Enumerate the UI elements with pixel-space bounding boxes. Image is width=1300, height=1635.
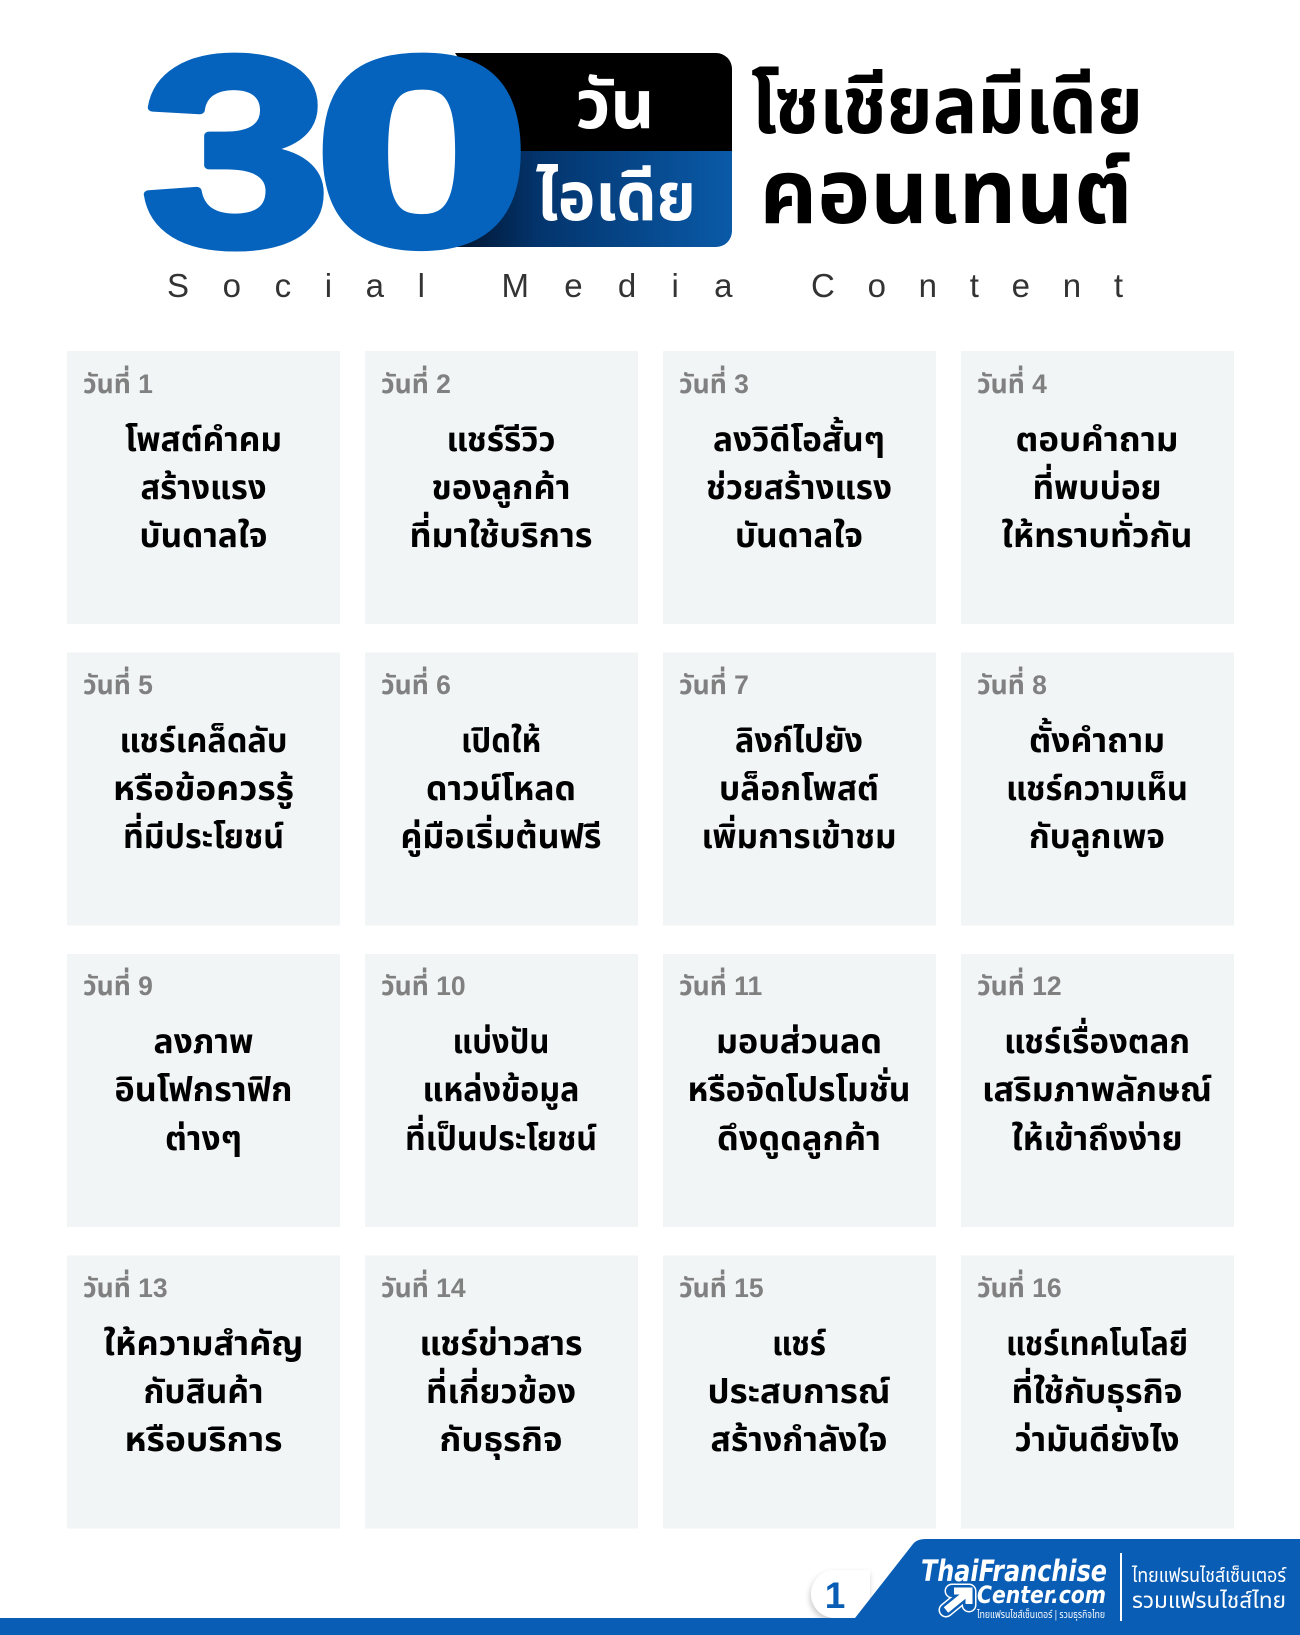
title block <box>141 2 1143 304</box>
digit 3: 3 <box>141 2 331 302</box>
card day 14: ที่เกี่ยวข้อง <box>426 1367 576 1411</box>
card day 8 <box>961 652 1234 926</box>
card day 7: เพิ่มการเข้าชม <box>702 814 896 856</box>
card day 9: ต่างๆ <box>165 1120 242 1158</box>
card day 7 <box>663 652 936 926</box>
card day 1: โพสต์คำคม <box>125 421 282 459</box>
page number pill <box>811 1570 870 1618</box>
card day 8: วันที่ 8 <box>977 666 1047 700</box>
word: idea: ไอเดีย <box>536 159 696 235</box>
card day 7: บล็อกโพสต์ <box>719 770 879 808</box>
card day 15: แชร์ <box>772 1325 826 1363</box>
card day 16: ที่ใช้กับธุรกิจ <box>1012 1367 1182 1412</box>
card day 1: สร้างแรง <box>140 469 266 507</box>
card day 9: อินโฟกราฟิก <box>114 1071 292 1109</box>
card day 16: วันที่ 16 <box>977 1269 1062 1303</box>
subtitle word 3: Content <box>811 267 1123 304</box>
word: wan: วัน <box>576 67 654 143</box>
card day 10: แบ่งปัน <box>452 1023 550 1061</box>
card day 11 <box>663 954 936 1227</box>
card day 6: เปิดให้ <box>461 722 541 760</box>
card day 13: ให้ความสำคัญ <box>104 1325 304 1363</box>
card day 4 <box>961 351 1234 624</box>
card day 15 <box>663 1256 936 1528</box>
card day 4: วันที่ 4 <box>977 365 1047 399</box>
card day 1 <box>67 351 340 624</box>
card day 12 <box>961 954 1234 1227</box>
card day 9 <box>67 954 340 1227</box>
card day 5: ที่มีประโยชน์ <box>123 812 284 856</box>
card day 6: ดาวน์โหลด <box>426 770 576 808</box>
logo tagline: ไทยแฟรนไชส์เซ็นเตอร์ | รวมธุรกิจไทย <box>976 1609 1105 1621</box>
card day 4: ที่พบบ่อย <box>1032 463 1162 507</box>
card day 2: ของลูกค้า <box>432 469 570 508</box>
card day 12: แชร์เรื่องตลก <box>1004 1017 1190 1061</box>
title box: black top <box>455 53 732 151</box>
card day 2: ที่มาใช้บริการ <box>410 511 592 555</box>
card day 9: ลงภาพ <box>154 1023 254 1061</box>
logo name line 2: Center.com <box>977 1581 1106 1609</box>
card day 3: ช่วยสร้างแรง <box>706 469 892 507</box>
card day 14 <box>365 1256 638 1528</box>
card day 15: ประสบการณ์ <box>708 1373 890 1411</box>
card day 10 <box>365 954 638 1227</box>
card day 11: หรือจัดโปรโมชั่น <box>688 1066 910 1109</box>
subtitle word 2: Media <box>502 267 733 304</box>
card day 3: ลงวิดีโอสั้นๆ <box>713 416 885 459</box>
card day 5 <box>67 652 340 926</box>
card day 2: แชร์รีวิว <box>446 421 556 459</box>
card day 6 <box>365 652 638 926</box>
footer divider <box>1120 1553 1122 1621</box>
card day 15: สร้างกำลังใจ <box>710 1421 888 1459</box>
card day 3: บันดาลใจ <box>735 517 863 555</box>
card day 14: วันที่ 14 <box>381 1269 466 1303</box>
card day 12: วันที่ 12 <box>977 967 1062 1001</box>
card day 5: หรือข้อควรรู้ <box>113 770 294 809</box>
title box: blue bottom <box>455 151 732 247</box>
card day 3 <box>663 351 936 624</box>
card day 11: ดึงดูดลูกค้า <box>717 1120 881 1159</box>
card day 11: วันที่ 11 <box>679 967 762 1001</box>
card day 2: วันที่ 2 <box>381 365 451 399</box>
logo <box>921 1554 1107 1621</box>
subtitle word 1: Social <box>167 267 425 304</box>
footer blue band <box>0 1539 1300 1635</box>
card day 12: เสริมภาพลักษณ์ <box>982 1071 1212 1109</box>
card day 14: แชร์ข่าวสาร <box>420 1325 582 1363</box>
heading line 1: โซเชียลมีเดีย <box>751 61 1143 150</box>
card day 3: วันที่ 3 <box>679 365 749 399</box>
card day 10: แหล่งข้อมูล <box>422 1071 580 1110</box>
card day 1: วันที่ 1 <box>83 365 153 399</box>
card day 6: วันที่ 6 <box>381 666 451 700</box>
card day 10: วันที่ 10 <box>381 967 466 1001</box>
card day 14: กับธุรกิจ <box>440 1421 562 1460</box>
heading line 2: คอนเทนต์ <box>760 143 1132 243</box>
digit 0: 0 <box>313 2 531 302</box>
footer <box>0 1539 1300 1635</box>
big number 30 <box>141 2 531 302</box>
card day 16 <box>961 1256 1234 1528</box>
card day 8: แชร์ความเห็น <box>1006 770 1188 808</box>
card day 15: วันที่ 15 <box>679 1269 764 1303</box>
subtitle <box>167 267 1123 304</box>
card day 12: ให้เข้าถึงง่าย <box>1012 1120 1182 1158</box>
card day 13: กับสินค้า <box>144 1373 264 1411</box>
card day 16: ว่ามันดียังไง <box>1014 1421 1180 1459</box>
card day 5: แชร์เคล็ดลับ <box>120 722 288 760</box>
card day 1: บันดาลใจ <box>140 517 268 555</box>
card day 10: ที่เป็นประโยชน์ <box>405 1114 597 1158</box>
logo arrow icon <box>946 1591 969 1610</box>
page number: 1 <box>825 1575 845 1616</box>
card day 16: แชร์เทคโนโลยี <box>1006 1325 1188 1363</box>
card day 13 <box>67 1256 340 1528</box>
card day 11: มอบส่วนลด <box>716 1023 882 1061</box>
logo name line 1: ThaiFranchise <box>921 1554 1107 1588</box>
card day 4: ตอบคำถาม <box>1016 421 1178 459</box>
card day 6: คู่มือเริ่มต้นฟรี <box>400 814 602 857</box>
card day 13: หรือบริการ <box>124 1421 282 1459</box>
card day 13: วันที่ 13 <box>83 1269 168 1303</box>
card day 4: ให้ทราบทั่วกัน <box>1002 512 1192 555</box>
card day 8: ตั้งคำถาม <box>1029 717 1165 760</box>
card day 9: วันที่ 9 <box>83 967 153 1001</box>
card day 2 <box>365 351 638 624</box>
footer thai line 2: รวมแฟรนไชส์ไทย <box>1132 1588 1286 1613</box>
card day 5: วันที่ 5 <box>83 666 153 700</box>
card day 7: วันที่ 7 <box>679 666 749 700</box>
card day 7: ลิงก์ไปยัง <box>735 722 863 760</box>
card day 8: กับลูกเพจ <box>1029 818 1165 857</box>
